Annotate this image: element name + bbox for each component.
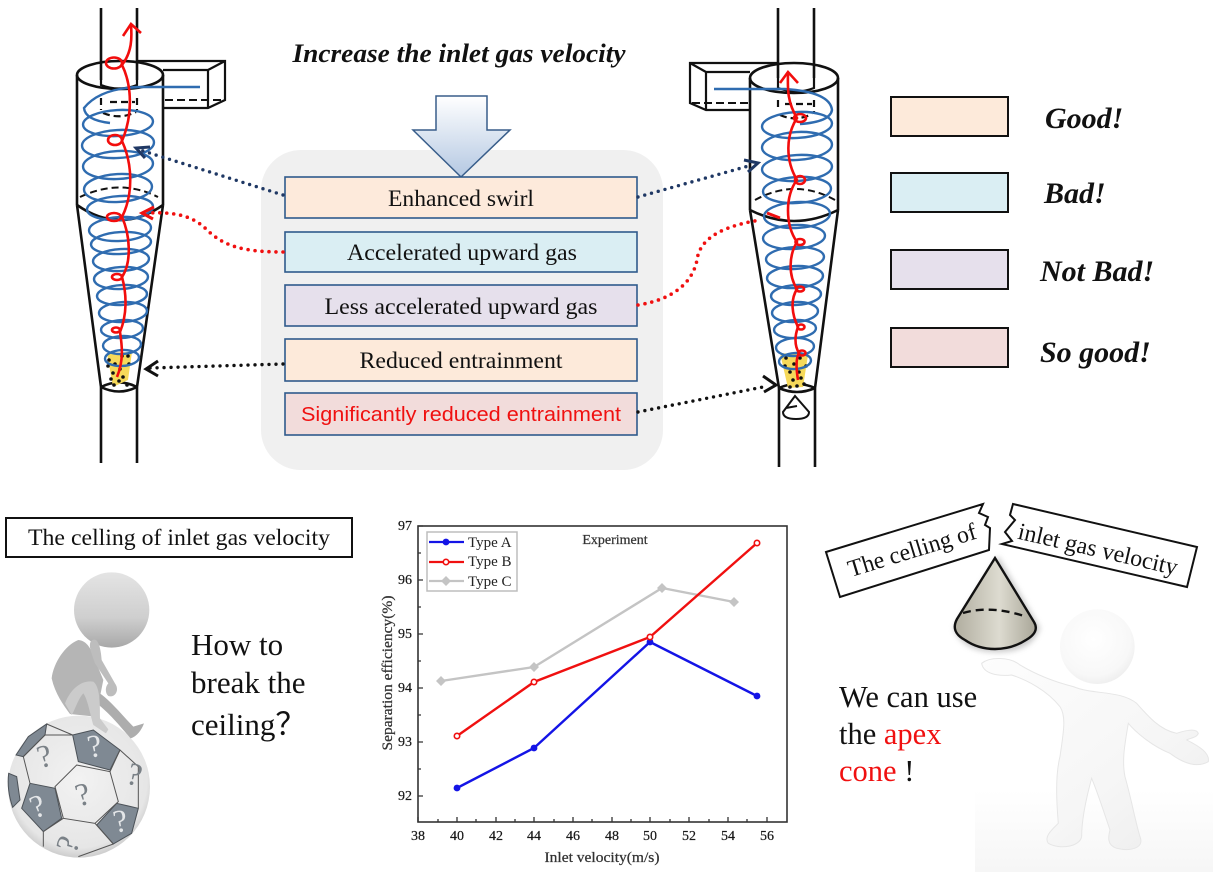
y ticks [418,526,423,796]
panel: center process panel background [261,150,663,470]
box: Reduced entrainment [285,339,637,381]
legend: Not Bad [891,250,1154,289]
arrow: swirl to left cyclone [136,147,283,195]
box: Enhanced swirl: Enhanced swirl [388,186,534,211]
legend: Bad [891,173,1106,212]
arrow: swirl to right cyclone [638,160,758,197]
legend: So good [891,328,1151,369]
arm and hand [90,640,117,696]
question marks: ? [48,831,87,857]
x tick labels: 42 [489,829,503,844]
x tick labels: 40 [450,829,464,844]
yellow dust pile [107,352,132,387]
red arrowhead [123,24,141,36]
question marks: ? [33,737,56,775]
chart subtitle: Experiment [582,533,648,548]
thinker head [74,572,149,648]
box: Accelerated upward gas [285,232,637,272]
dark panels [8,724,138,844]
box: Reduced entrainment: Reduced entrainment [360,348,563,373]
arrow: accelerated gas to left cyclone [142,207,283,252]
y tick labels: 94 [398,681,412,696]
question marks: ? [25,786,50,825]
series: Type A [454,639,760,791]
icon: apex cone [954,556,1040,652]
box: Less accelerated upward gas [285,285,637,326]
box: Significantly reduced entrainment [285,393,637,435]
dust particles [783,356,808,389]
y tick labels: 96 [398,573,412,588]
cyclone outline [690,8,838,467]
icon: white presenter figure [982,609,1208,850]
arrow: reduced entrainment to left cyclone [146,361,283,376]
y tick labels [398,519,412,804]
x tick labels: 50 [643,829,657,844]
text: We can use the apex cone: We can use [839,680,977,714]
diagram: left cyclone [77,8,225,463]
question marks: ? [84,727,105,765]
dust particles [106,354,131,387]
y tick labels: 97 [398,519,412,534]
text: How to break the ceiling: How to [191,627,283,662]
blue swirl [714,89,833,370]
text: How to break the ceiling: break the [191,665,305,700]
diagram: right cyclone [690,8,838,467]
icon: thinker sitting on question-mark ball [8,572,150,858]
series: Type C [436,583,739,686]
text: We can use the apex cone: the apex [839,717,941,751]
x tick labels: 52 [682,829,696,844]
x tick labels [411,829,774,844]
chart legend: Type A [468,535,512,551]
question marks: ? [123,755,146,793]
soccer ball [8,716,150,858]
plot frame [418,526,787,822]
box: Significantly reduced entrainment: Significantly reduced entrainment [301,403,621,426]
near leg [65,681,108,733]
heading box: The celling of inlet gas velocity [6,518,352,557]
x tick labels: 46 [566,829,580,844]
y axis title: Separation efficiency(%) [380,595,396,750]
banner: The celling of (broken left): The celling of [845,519,980,583]
box: Enhanced swirl [285,177,637,218]
x ticks [418,817,767,822]
floor shadow behind presenter [975,790,1213,872]
cyclone outline [77,8,225,463]
apex cone [783,396,809,419]
legend: So good: So good! [1040,336,1151,369]
red upward gas path [106,25,131,377]
y tick labels: 93 [398,735,412,750]
text: How to break the ceiling: ceiling？ [191,707,306,742]
legend: Good [891,97,1123,136]
x tick labels: 48 [605,829,619,844]
y tick labels: 92 [398,789,412,804]
legend: Not Bad: Not Bad! [1039,255,1154,288]
panel seams [23,724,138,857]
banner: The celling of (broken left) [826,504,990,597]
question marks: ? [110,802,130,840]
legend: Good: Good! [1045,102,1123,135]
chart legend: Type C [468,574,512,590]
x tick labels: 38 [411,829,425,844]
x tick labels: 54 [721,829,735,844]
question marks [25,727,146,857]
chart legend: Type B [468,554,512,570]
box: Accelerated upward gas: Accelerated upward gas [347,240,577,265]
x axis title: Inlet velocity(m/s) [544,850,660,866]
text: We can use the apex cone: cone ! [839,754,914,788]
red upward gas path [788,72,806,380]
far leg [97,693,144,738]
torso [52,640,103,717]
arrow: less accelerated gas to right cyclone [638,213,780,305]
question marks: ? [71,775,94,813]
x tick labels: 56 [760,829,774,844]
x tick labels: 44 [527,829,541,844]
line chart: separation efficiency vs inlet velocity [380,519,787,866]
icon: big down arrow [413,96,510,177]
chart legend [427,532,517,591]
series: Type B [454,540,760,739]
arrow: significantly reduced entrainment to right cyclone [638,376,776,412]
legend: Bad: Bad! [1043,177,1106,210]
yellow dust pile [780,353,808,388]
blue swirl [81,87,200,367]
box: Less accelerated upward gas: Less accelerated upward gas [324,294,598,319]
red arrowhead [780,72,798,83]
text: How to break the ceiling [191,627,306,742]
title: Increase the inlet gas velocity [291,39,626,68]
text: We can use the apex cone [839,680,977,788]
y tick labels: 95 [398,627,412,642]
heading box: The celling of inlet gas velocity: The celling of inlet gas velocity [28,525,331,550]
banner: inlet gas velocity (broken right) [1002,504,1197,587]
banner: inlet gas velocity (broken right): inlet gas velocity [1015,519,1180,581]
